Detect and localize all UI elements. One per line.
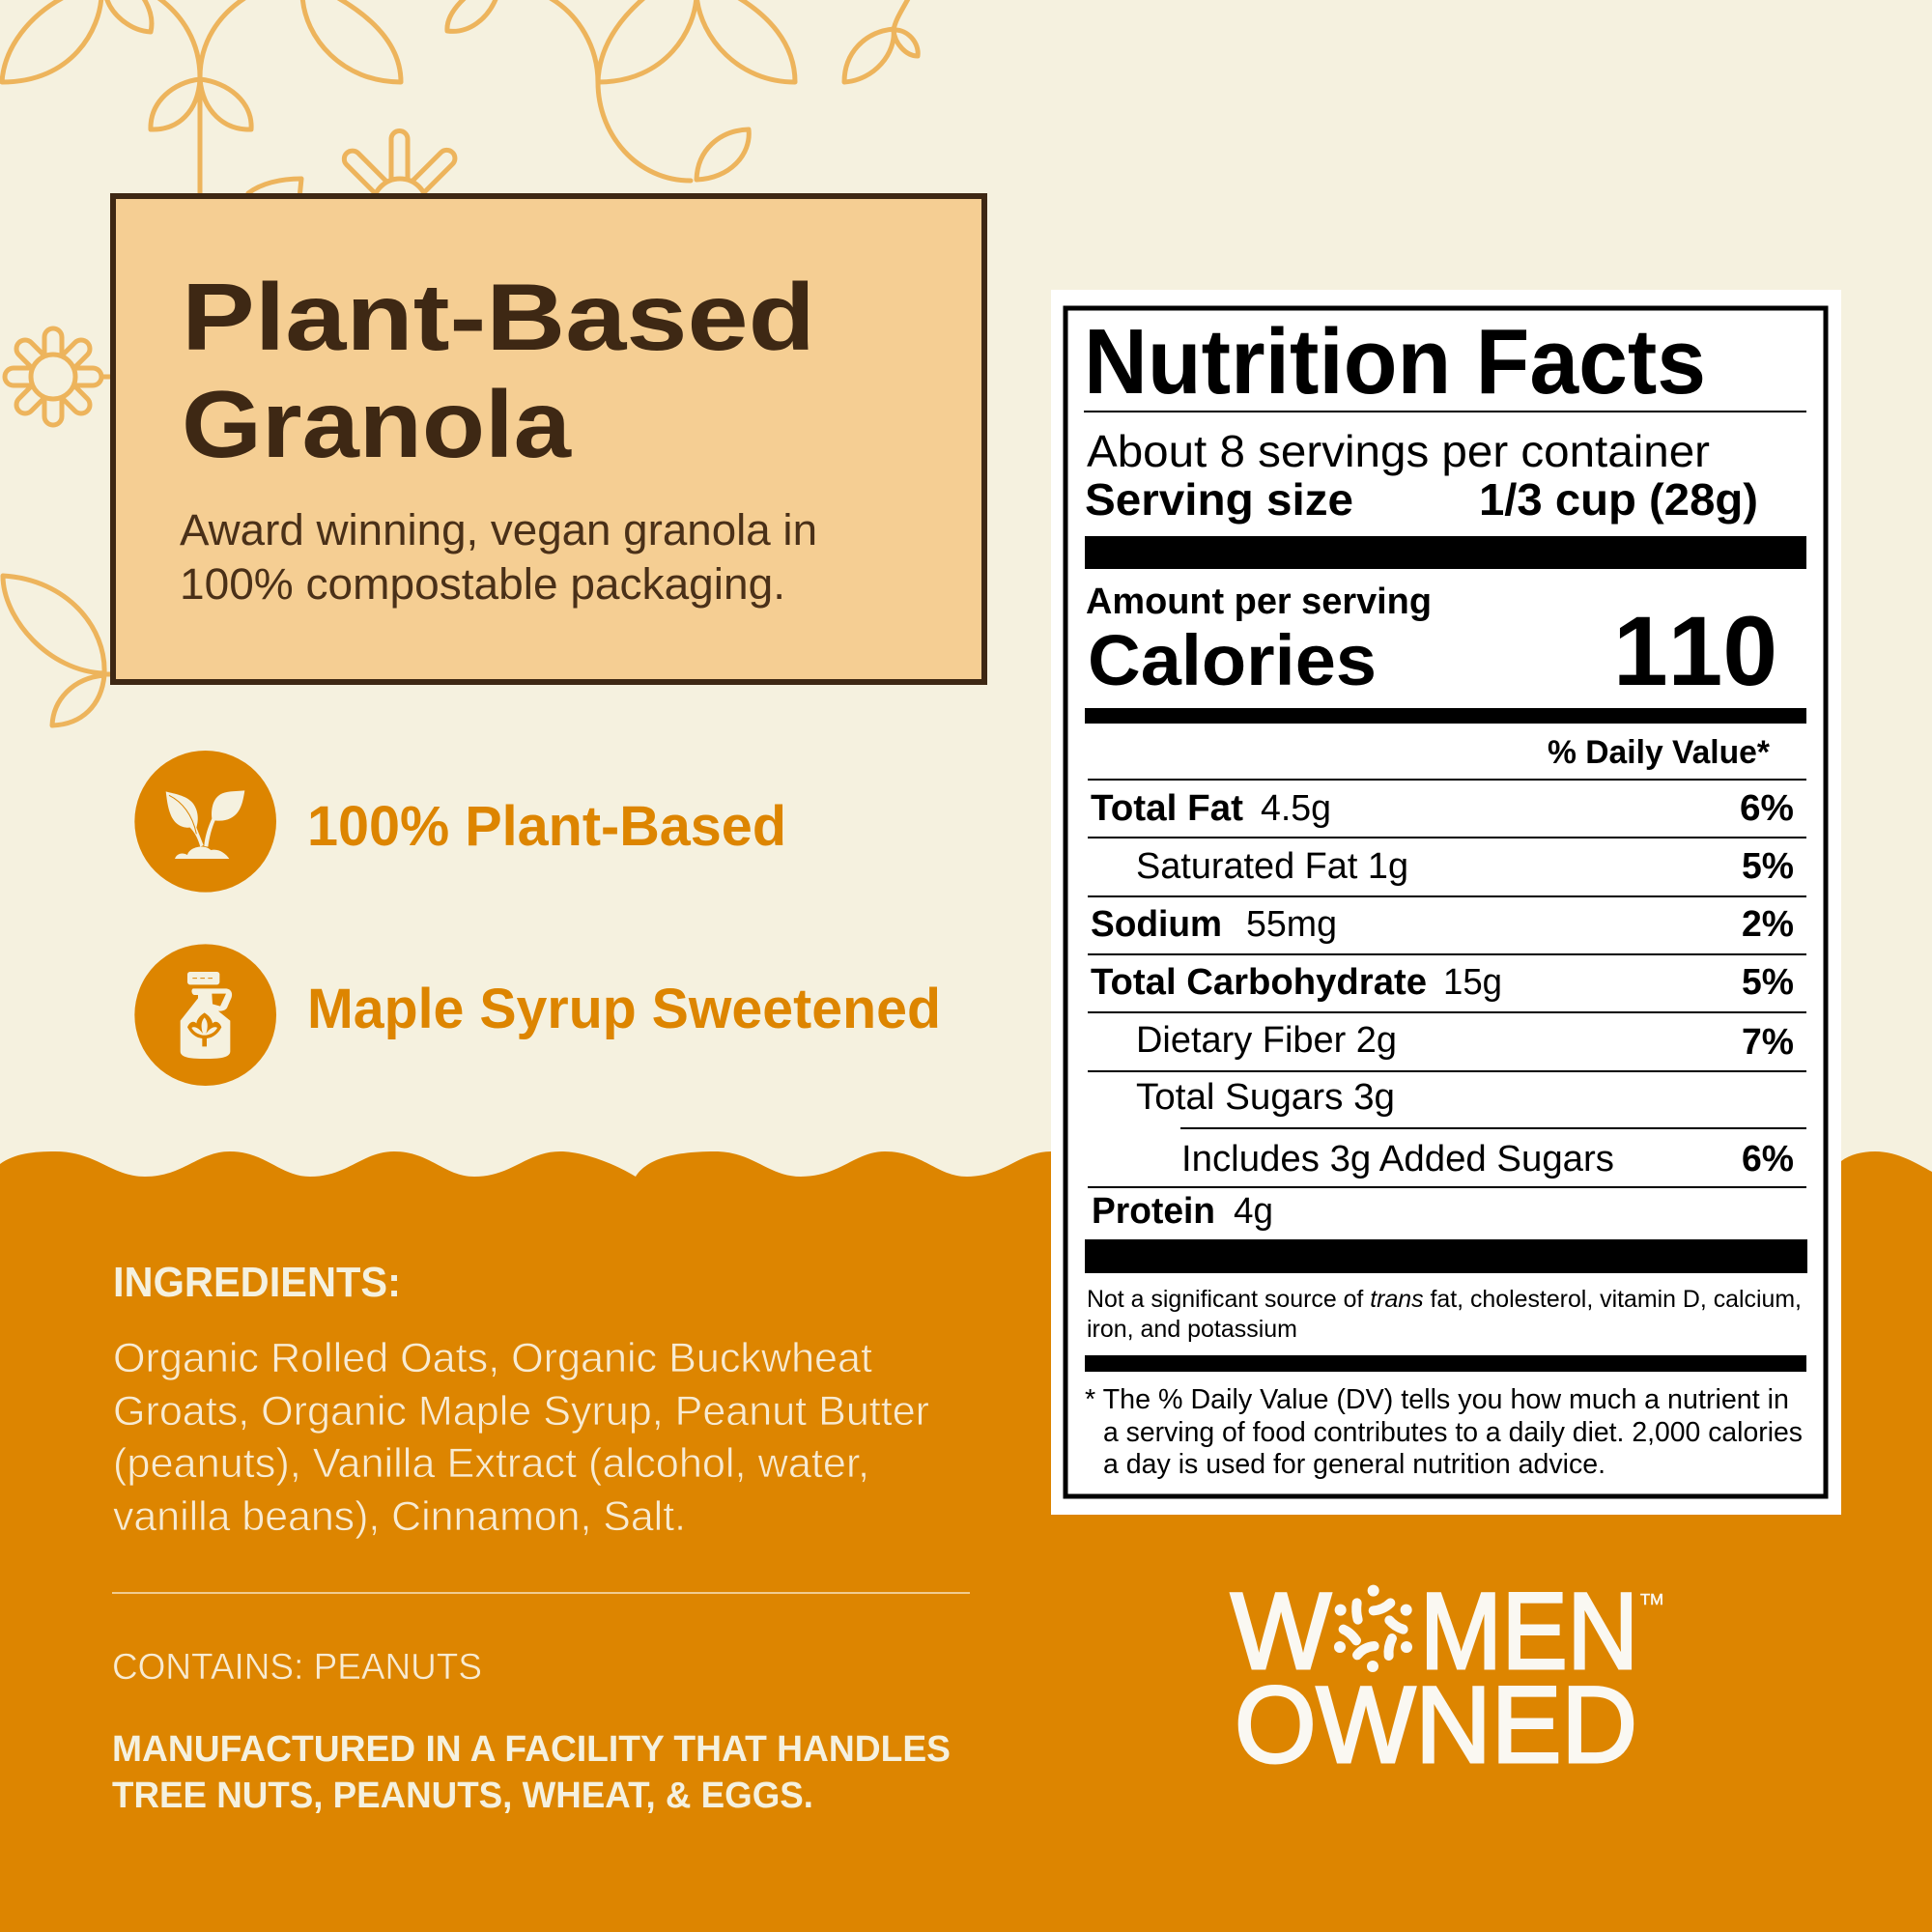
label: Maple Syrup Sweetened (307, 978, 941, 1040)
facility warning (112, 1729, 951, 1816)
facility warning: TREE NUTS, PEANUTS, WHEAT, & EGGS. (112, 1776, 813, 1816)
ingredients block (113, 1259, 929, 1540)
heading: Granola (182, 371, 573, 477)
ingredients list: Organic Rolled Oats, Organic Buckwheat (113, 1335, 872, 1381)
nutrient rows: Protein (1092, 1191, 1215, 1232)
nutrient rows: 2% (1742, 904, 1794, 945)
nutrient rows: 5% (1742, 846, 1794, 887)
women owned logo (1231, 1571, 1663, 1785)
servings: Serving size (1085, 474, 1353, 525)
feature: 100% plant-based (134, 751, 786, 893)
nutrient rows: 4.5g (1261, 788, 1331, 829)
servings: About 8 servings per container (1087, 426, 1710, 476)
ingredients list: vanilla beans), Cinnamon, Salt. (113, 1493, 686, 1540)
heading: Plant-Based (182, 264, 815, 370)
ingredients list (113, 1335, 929, 1540)
nutrient rows: 15g (1443, 962, 1502, 1003)
calories: Calories (1088, 620, 1377, 700)
nutrient rows: 4g (1234, 1191, 1273, 1232)
calories: Amount per serving (1086, 582, 1432, 622)
decorative botanical line art (2, 0, 918, 725)
subtitle: 100% compostable packaging. (180, 559, 785, 609)
daily value header: % Daily Value* (1548, 734, 1771, 771)
icon: maple syrup jug (134, 944, 276, 1086)
daily value footnote (1085, 1384, 1803, 1480)
label: 100% Plant-Based (307, 795, 786, 858)
nutrient rows: Dietary Fiber 2g (1136, 1020, 1397, 1061)
nutrient rows (1088, 788, 1806, 1232)
nutrient rows: Total Fat (1091, 788, 1243, 829)
daily value footnote: a serving of food contributes to a daily diet. 2,000 calories (1103, 1417, 1803, 1448)
heading (182, 264, 815, 477)
nutrient rows: Saturated Fat 1g (1136, 846, 1408, 887)
women owned logo: OWNED (1235, 1664, 1637, 1785)
facility warning: MANUFACTURED IN A FACILITY THAT HANDLES (112, 1729, 951, 1770)
daily value footnote: * The % Daily Value (DV) tells you how much a nutrient in (1085, 1384, 1789, 1415)
title panel (113, 196, 984, 682)
nutrient rows: 5% (1742, 962, 1794, 1003)
ingredients list: (peanuts), Vanilla Extract (alcohol, water, (113, 1440, 869, 1487)
trans fat note: iron, and potassium (1087, 1316, 1297, 1343)
nutrient rows: Total Sugars 3g (1136, 1077, 1395, 1118)
servings: 1/3 cup (28g) (1479, 474, 1758, 525)
women owned logo: MEN (1420, 1571, 1638, 1691)
women owned logo: TM (1640, 1592, 1663, 1608)
nutrient rows: 7% (1742, 1022, 1794, 1063)
servings (1085, 426, 1758, 525)
nutrition heading: Nutrition Facts (1084, 310, 1706, 413)
allergen statement: CONTAINS: PEANUTS (112, 1647, 482, 1688)
women owned logo: W (1231, 1571, 1331, 1691)
ingredients list: Groats, Organic Maple Syrup, Peanut Butter (113, 1388, 929, 1435)
nutrient rows: 6% (1742, 1139, 1794, 1179)
trans fat note: Not a significant source of trans fat, cholesterol, vitamin D, calcium, (1087, 1286, 1802, 1313)
ingredients heading: INGREDIENTS: (113, 1259, 401, 1306)
subtitle (180, 505, 817, 609)
nutrient rows: Total Carbohydrate (1091, 962, 1427, 1003)
nutrient rows: 6% (1740, 788, 1794, 829)
feature: maple syrup sweetened (134, 944, 941, 1086)
trans fat note (1087, 1286, 1802, 1343)
orange wave footer background (0, 1151, 1932, 1932)
icon: oat ring (1334, 1585, 1412, 1672)
calories (1086, 582, 1777, 706)
icon: sprout (134, 751, 276, 893)
nutrient rows: Includes 3g Added Sugars (1181, 1139, 1614, 1179)
nutrition facts panel (1051, 290, 1841, 1515)
nutrient rows: 55mg (1246, 904, 1337, 945)
subtitle: Award winning, vegan granola in (180, 505, 817, 554)
calories: 110 (1613, 596, 1777, 706)
nutrient rows: Sodium (1091, 904, 1222, 945)
daily value footnote: a day is used for general nutrition advice. (1103, 1449, 1605, 1480)
